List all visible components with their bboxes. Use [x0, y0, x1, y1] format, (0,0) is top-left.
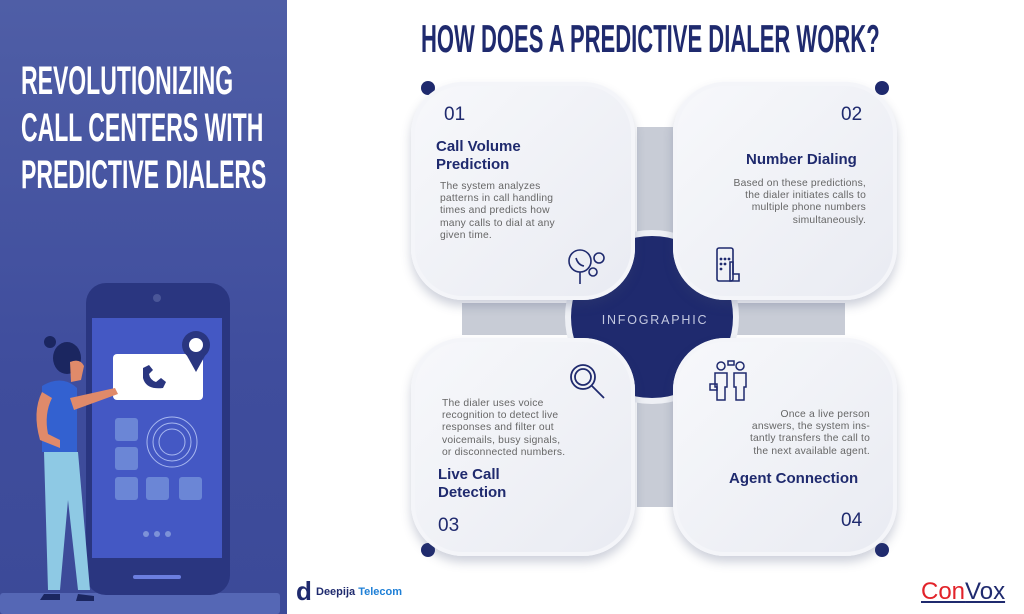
card 03: The dialer uses voice: [442, 398, 544, 409]
card 03: Detection: [438, 484, 506, 501]
left panel: [0, 0, 287, 614]
card 03: recognition to detect live: [442, 410, 558, 421]
icon: two agents: [709, 360, 747, 401]
card 04: the next available agent.: [753, 446, 870, 457]
card 02: 02: [841, 104, 862, 125]
icon: magnifier with phone and gear: [568, 249, 605, 284]
card 02: multiple phone numbers: [752, 202, 866, 213]
card 01: 01: [444, 104, 465, 125]
illustration: woman with phone: [0, 283, 280, 614]
card 03: responses and filter out: [442, 422, 554, 433]
card 01: Prediction: [436, 156, 509, 173]
left title: PREDICTIVE DIALERS: [21, 153, 266, 197]
center circle: [571, 236, 733, 398]
card 04: [673, 338, 897, 556]
logo: Deepija Telecom: d: [296, 576, 312, 606]
icon: magnifier search: [570, 364, 605, 399]
card 02: [673, 82, 897, 300]
card 04: tantly transfers the call to: [750, 433, 870, 444]
left title: [21, 59, 266, 197]
card 02: Based on these predictions,: [734, 178, 866, 189]
card 01: given time.: [440, 230, 492, 241]
card 01: patterns in call handling: [440, 193, 553, 204]
icon: phone keypad: [716, 247, 740, 282]
card 01: The system analyzes: [440, 181, 541, 192]
card 03: voicemails, busy signals,: [442, 435, 560, 446]
card 01: [411, 82, 635, 300]
logo: Deepija Telecom: [296, 576, 402, 606]
card 03: 03: [438, 515, 459, 536]
card 04: Agent Connection: [729, 470, 858, 487]
center label: INFOGRAPHIC: [602, 313, 708, 327]
card 04: 04: [841, 510, 862, 531]
card 01: many calls to dial at any: [440, 218, 555, 229]
card 02: simultaneously.: [793, 215, 866, 226]
card 04: answers, the system ins-: [752, 421, 870, 432]
card 03: Live Call: [438, 466, 500, 483]
gray cross background: [462, 127, 845, 507]
left title: REVOLUTIONIZING: [21, 59, 233, 103]
main heading: HOW DOES A PREDICTIVE DIALER WORK?: [421, 18, 880, 61]
corner dots: [421, 81, 889, 557]
card 02: the dialer initiates calls to: [745, 190, 866, 201]
card 01: times and predicts how: [440, 205, 550, 216]
card 02: Number Dialing: [746, 151, 857, 168]
card 03: [411, 338, 635, 556]
left title: CALL CENTERS WITH: [21, 106, 263, 150]
card 01: Call Volume: [436, 138, 521, 155]
card 04: Once a live person: [781, 409, 870, 420]
card 03: or disconnected numbers.: [442, 447, 565, 458]
logo: Deepija Telecom: Deepija Telecom: [316, 586, 402, 598]
logo: ConVox: ConVox: [921, 578, 1005, 605]
